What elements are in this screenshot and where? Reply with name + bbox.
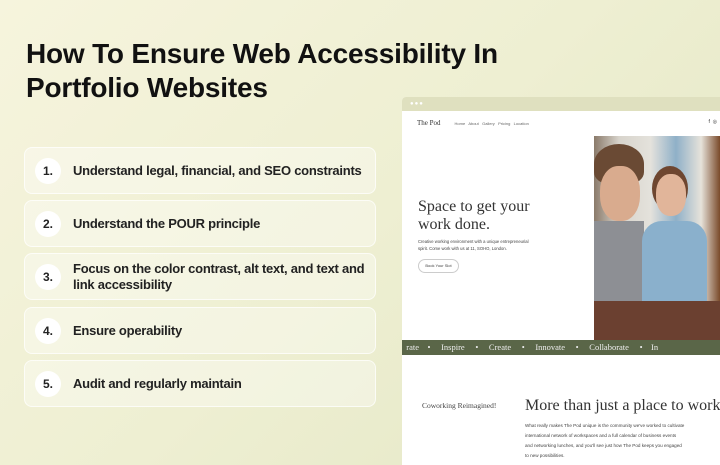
button xyxy=(418,259,459,273)
green band xyxy=(402,340,720,355)
card 4 xyxy=(24,307,376,354)
card 2: 2. xyxy=(43,217,53,231)
photo xyxy=(594,136,720,340)
card 5: Audit and regularly maintain xyxy=(73,376,242,390)
green band: rate • Inspire • Create • Innovate • Collaborate • In xyxy=(406,342,658,352)
card 4: 4. xyxy=(43,324,53,338)
hero heading: work done. xyxy=(418,216,490,233)
subheading: Coworking Reimagined! xyxy=(422,401,496,410)
card 4: Ensure operability xyxy=(73,322,182,338)
title: How To Ensure Web Accessibility In xyxy=(26,38,498,69)
browser bar: ●●● xyxy=(410,101,424,107)
button: Book Your Slot xyxy=(425,263,452,268)
browser bar xyxy=(402,97,720,111)
card 3 xyxy=(24,253,376,300)
nav: f ◎ xyxy=(708,119,717,125)
section text: and networking lunches, and you'll see just how The Pod keeps you engaged xyxy=(525,443,682,448)
card 5: 5. xyxy=(43,377,53,391)
section text: international network of workspaces and a full calendar of business events xyxy=(525,433,676,438)
card 1: 1. xyxy=(43,164,53,178)
section text: What really makes The Pod unique is the community we've worked to cultivate xyxy=(525,423,684,428)
card 2 xyxy=(24,200,376,247)
card 1 xyxy=(24,147,376,194)
card 3: Focus on the color contrast, alt text, and text and link accessibility xyxy=(73,260,364,292)
card 5 xyxy=(24,360,376,407)
nav: The Pod Home About Gallery Pricing Location xyxy=(417,119,529,127)
hero text xyxy=(418,239,529,251)
section text xyxy=(525,423,684,458)
section heading: More than just a place to work xyxy=(525,397,720,414)
browser mockup xyxy=(402,97,720,465)
card 3: 3. xyxy=(43,270,53,284)
title: Portfolio Websites xyxy=(26,72,268,103)
title xyxy=(26,38,498,103)
hero text: spirit. Come work with us at 11, SOHO, London. xyxy=(418,246,507,251)
hero text: Creative working environment with a unique entrepreneurial xyxy=(418,239,529,244)
card 1: Understand legal, financial, and SEO constraints xyxy=(73,162,362,178)
section text: to new possibilities. xyxy=(525,453,565,458)
hero heading xyxy=(418,198,530,233)
nav xyxy=(417,119,717,127)
hero heading: Space to get your xyxy=(418,198,530,215)
card 2: Understand the POUR principle xyxy=(73,216,260,230)
